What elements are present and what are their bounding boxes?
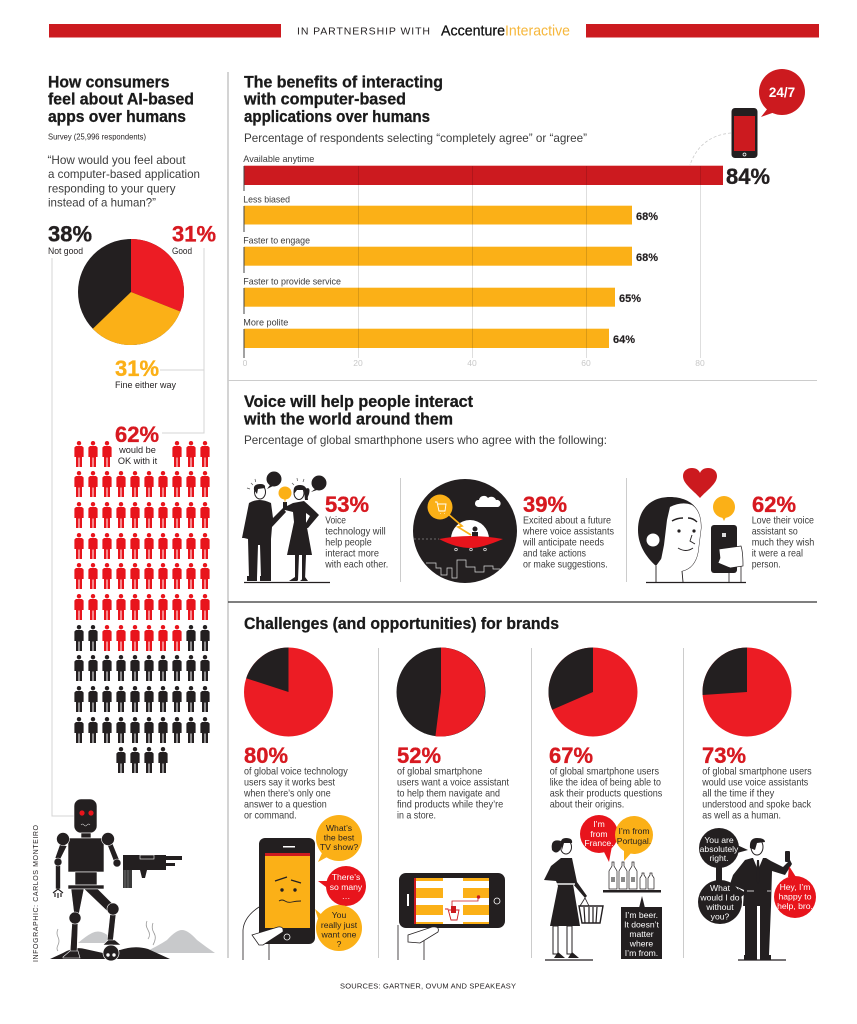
phone and bubbles bbox=[266, 472, 326, 510]
stat: 53 percent: with each other. bbox=[324, 560, 388, 570]
left heading: feel about AI-based bbox=[48, 90, 194, 108]
bubble: there's so many: There’s bbox=[332, 872, 360, 882]
survey note: Survey (25,996 respondents) bbox=[48, 131, 146, 141]
stat text: of global voice technology bbox=[244, 766, 348, 777]
bar: less biased: Less biased bbox=[243, 193, 290, 204]
bar: faster to engage: Faster to engage bbox=[243, 234, 310, 245]
stat text: users want a voice assistant bbox=[397, 777, 509, 788]
stat: 39 percent: Excited about a future bbox=[523, 516, 611, 526]
dome bbox=[451, 520, 489, 539]
survey question: instead of a human?” bbox=[48, 196, 156, 210]
panel: consumer feelings bbox=[48, 73, 216, 816]
bar: less biased bbox=[243, 193, 658, 224]
stat: 39 percent: where voice assistants bbox=[522, 526, 614, 538]
pictogram: red people bbox=[74, 441, 210, 651]
stat: 62 percent: person. bbox=[752, 560, 781, 570]
stat: 39 percent: and take actions bbox=[523, 548, 586, 560]
bubble: there's so many: … bbox=[342, 891, 350, 901]
saucer bbox=[439, 536, 503, 548]
bar: faster to provide service bbox=[243, 276, 641, 307]
survey question: responding to your query bbox=[48, 182, 176, 196]
box: beer: I’m from. bbox=[625, 948, 658, 958]
box: beer: where bbox=[629, 938, 653, 948]
bubble: what would I do: without bbox=[705, 902, 734, 912]
bubble: what's the best: What’s bbox=[326, 823, 352, 833]
smoke squiggles bbox=[57, 921, 155, 951]
stat text: find products while they’re bbox=[397, 799, 504, 810]
label: fine either way: Fine either way bbox=[115, 379, 176, 390]
bubble: portugal: I’m from bbox=[618, 826, 650, 836]
robot illustration bbox=[50, 799, 215, 961]
robot mouth bbox=[81, 824, 90, 826]
bubble: what would I do: you? bbox=[711, 912, 730, 922]
column: 73 percent bbox=[698, 648, 816, 960]
box: beer: It doesn’t bbox=[624, 920, 660, 930]
man bbox=[242, 479, 286, 581]
bubble: you really just: want one bbox=[321, 930, 357, 940]
stat text: ask their products questions bbox=[550, 788, 662, 799]
stat: 53 percent bbox=[324, 492, 388, 570]
axis labels: 80 bbox=[695, 358, 705, 368]
bar: available anytime bbox=[243, 153, 770, 189]
panel: voice bbox=[242, 393, 815, 583]
column: 67 percent bbox=[544, 648, 662, 960]
axis labels: 0 bbox=[243, 358, 248, 368]
column: 80 percent bbox=[243, 648, 366, 960]
label: not good: 38% bbox=[48, 222, 92, 247]
column: 52 percent bbox=[396, 648, 509, 960]
bubble: there's so many: so many bbox=[330, 882, 363, 892]
axis labels: 60 bbox=[581, 358, 591, 368]
panel: challenges bbox=[243, 615, 816, 960]
voice heading bbox=[243, 393, 473, 428]
separators bbox=[400, 478, 626, 582]
sources: SOURCES: GARTNER, OVUM AND SPEAKEASY bbox=[340, 982, 516, 990]
woman bbox=[544, 838, 587, 958]
bar chart: benefits bbox=[243, 153, 770, 368]
bar: faster to provide service: Faster to provide service bbox=[243, 276, 341, 287]
illustration: businessman bbox=[698, 828, 816, 960]
illustration: shopper bbox=[544, 815, 662, 960]
stat text: as well as a human. bbox=[702, 810, 781, 821]
section divider bbox=[228, 601, 817, 603]
left heading: How consumers bbox=[48, 73, 170, 91]
heart bbox=[683, 468, 717, 498]
skull bbox=[103, 945, 119, 961]
shelf with bottles bbox=[603, 862, 661, 892]
robot eyes bbox=[79, 810, 85, 816]
phone and hand bbox=[711, 525, 737, 573]
label: fine either way: 31% bbox=[115, 356, 159, 381]
cloud bbox=[475, 496, 501, 507]
stat text: of global smartphone users bbox=[702, 766, 812, 777]
stat text: users say it works best bbox=[244, 777, 335, 788]
bubble: you are absolutely right bbox=[699, 828, 748, 884]
stat text: 80% bbox=[244, 743, 288, 768]
stat: 53 percent: technology will bbox=[325, 526, 386, 538]
label: good: 31% bbox=[172, 222, 216, 247]
bubble: you really just: really just bbox=[321, 920, 358, 930]
survey question: “How would you feel about bbox=[48, 153, 186, 167]
header band: IN PARTNERSHIP WITH bbox=[297, 26, 430, 38]
pie: 73 percent bbox=[702, 648, 792, 736]
illustration: face in love with phone bbox=[638, 468, 746, 582]
pie: 67 percent bbox=[548, 648, 638, 736]
bubble: there's so many bbox=[318, 866, 366, 906]
bar: more polite: More polite bbox=[243, 317, 288, 328]
stat: 53 percent: Voice bbox=[325, 516, 346, 526]
stat text bbox=[397, 743, 509, 821]
hills bbox=[78, 930, 215, 953]
bubble: you really just bbox=[315, 905, 362, 951]
pictogram: black people bbox=[74, 625, 210, 773]
header band: Interactive bbox=[505, 24, 570, 40]
axis labels bbox=[243, 358, 705, 368]
box: beer: I’m beer. bbox=[625, 910, 658, 920]
stat text bbox=[549, 743, 662, 810]
box: beer: matter bbox=[629, 929, 654, 939]
stat: 39 percent bbox=[522, 492, 614, 570]
axis labels: 20 bbox=[353, 358, 363, 368]
stat text: like the idea of being able to bbox=[550, 777, 661, 788]
header band: Accenture bbox=[441, 24, 505, 40]
stat text: would use voice assistants bbox=[701, 777, 808, 788]
stat text: when there’s only one bbox=[243, 788, 331, 799]
stat: 53 percent: interact more bbox=[325, 548, 379, 560]
cart bubble bbox=[428, 494, 452, 520]
box: beer bbox=[621, 896, 662, 959]
man bbox=[730, 838, 792, 960]
voice heading: with the world around them bbox=[243, 410, 453, 428]
main vertical divider bbox=[227, 72, 229, 958]
bar: more polite bbox=[243, 317, 635, 348]
bar: faster to engage: 68% bbox=[636, 252, 658, 264]
challenges heading: Challenges (and opportunities) for brands bbox=[244, 615, 559, 633]
stat: 39 percent: will anticipate needs bbox=[522, 538, 604, 548]
bubble: happy to help: help, bro. bbox=[777, 901, 813, 911]
pie chart: sentiment bbox=[78, 239, 184, 345]
stat text: in a store. bbox=[397, 810, 436, 821]
label: fine either way bbox=[115, 356, 176, 390]
survey question bbox=[48, 153, 200, 210]
bubble: happy to help: Hey, I’m bbox=[780, 882, 810, 892]
stat text: about their origins. bbox=[550, 799, 624, 810]
benefits heading bbox=[243, 73, 443, 126]
bar: faster to engage bbox=[243, 234, 658, 266]
stat text: 67% bbox=[549, 743, 593, 768]
axis labels: 40 bbox=[467, 358, 477, 368]
panel: benefits bbox=[243, 69, 805, 368]
label: 62 percent: OK with it bbox=[118, 456, 158, 466]
bar: available anytime: 84% bbox=[726, 164, 770, 189]
pie: 52 percent bbox=[396, 648, 486, 736]
survey question: a computer-based application bbox=[48, 167, 200, 181]
stat: 62 percent: much they wish bbox=[752, 538, 815, 548]
stat: 53 percent: help people bbox=[325, 538, 372, 548]
skyline bbox=[426, 560, 500, 578]
pie: 80 percent bbox=[244, 648, 333, 736]
illustration: sad phone bbox=[243, 815, 366, 960]
stat text: answer to a question bbox=[244, 799, 327, 810]
bubble bbox=[713, 496, 735, 518]
basket bbox=[579, 898, 603, 923]
illustration: UFO and shopping cart bbox=[413, 479, 517, 583]
label: 62 percent: would be bbox=[118, 445, 156, 455]
stat text: to help them navigate and bbox=[397, 788, 500, 799]
stat: 53 percent: 53% bbox=[325, 492, 369, 517]
label: 62 percent bbox=[115, 422, 159, 466]
bubble: you are absolutely right: You are bbox=[704, 835, 734, 845]
header band bbox=[49, 24, 819, 40]
hand bbox=[243, 907, 269, 960]
bubble: france: I’m bbox=[593, 819, 605, 829]
stat: 39 percent: or make suggestions. bbox=[523, 560, 608, 570]
label: 62 percent: 62% bbox=[115, 422, 159, 447]
bubble: france: France. bbox=[584, 838, 614, 848]
bubble: you really just: You bbox=[332, 910, 346, 920]
stat: 62 percent bbox=[752, 492, 815, 570]
bubble: what's the best bbox=[316, 815, 362, 862]
left heading: apps over humans bbox=[48, 108, 186, 126]
bubble: what would I do: What bbox=[710, 883, 731, 893]
stat text bbox=[701, 743, 812, 821]
stat: 62 percent: Love their voice bbox=[752, 516, 814, 526]
stat text: 73% bbox=[702, 743, 746, 768]
bar: available anytime: Available anytime bbox=[243, 153, 314, 164]
bubble: portugal bbox=[615, 816, 653, 861]
stat text: of global smartphone users bbox=[550, 766, 659, 777]
label: good: Good bbox=[172, 245, 192, 256]
stat: 62 percent: assistant so bbox=[752, 526, 798, 538]
bubble: you are absolutely right: absolutely bbox=[700, 844, 739, 854]
connector lines bbox=[52, 248, 204, 816]
stat: 39 percent: 39% bbox=[523, 492, 567, 517]
bubble: what's the best: the best bbox=[324, 832, 355, 842]
benefits heading: with computer-based bbox=[243, 90, 406, 108]
credit: INFOGRAPHIC: CARLOS MONTEIRO bbox=[33, 824, 40, 962]
bubble: you are absolutely right: right. bbox=[709, 853, 729, 863]
illustration: store navigation phone bbox=[398, 873, 505, 960]
stat text: 52% bbox=[397, 743, 441, 768]
gun bbox=[123, 855, 182, 888]
bubble: happy to help: happy to bbox=[779, 892, 812, 902]
stat: 62 percent: it were a real bbox=[752, 548, 803, 560]
head bbox=[638, 497, 700, 566]
bubble: what's the best: TV show? bbox=[320, 842, 358, 852]
left heading bbox=[48, 73, 194, 126]
stat text: all the time if they bbox=[702, 788, 775, 799]
benefits heading: applications over humans bbox=[244, 108, 430, 126]
section divider bbox=[228, 380, 817, 382]
stat text bbox=[243, 743, 348, 821]
ground bbox=[50, 947, 170, 959]
bubble: you really just: ? bbox=[337, 939, 342, 949]
bar: faster to provide service: 65% bbox=[619, 293, 641, 305]
stat text: of global smartphone bbox=[397, 766, 483, 777]
bubble: what would I do bbox=[698, 880, 746, 924]
benefits heading: The benefits of interacting bbox=[244, 73, 443, 91]
stat text: or command. bbox=[244, 810, 297, 821]
bubble: france bbox=[580, 815, 618, 862]
bubble: france: from bbox=[590, 829, 608, 839]
signal bolt bbox=[447, 513, 471, 535]
bubble: what would I do: would I do bbox=[699, 892, 740, 902]
robot hand bbox=[53, 889, 63, 898]
bubble: portugal: Portugal. bbox=[617, 836, 651, 846]
benefits subtitle: Percentage of respondents selecting “completely agree” or “agree” bbox=[244, 131, 587, 145]
bar: less biased: 68% bbox=[636, 211, 658, 223]
illustration: couple talking bbox=[242, 472, 330, 582]
bar: more polite: 64% bbox=[613, 334, 635, 346]
stat: 62 percent: 62% bbox=[752, 492, 796, 517]
icon: phone with 24/7 bubble bbox=[690, 69, 805, 165]
label: not good: Not good bbox=[48, 245, 83, 256]
icon: phone with 24/7 bubble: 24/7 bbox=[769, 85, 795, 100]
stat text: understood and spoke back bbox=[702, 799, 812, 810]
robot body bbox=[54, 799, 121, 958]
voice subtitle: Percentage of global smarthphone users who agree with the following: bbox=[244, 433, 607, 447]
bubble: happy to help bbox=[774, 866, 816, 918]
woman bbox=[285, 478, 319, 581]
separators bbox=[378, 648, 684, 958]
voice heading: Voice will help people interact bbox=[244, 393, 473, 411]
